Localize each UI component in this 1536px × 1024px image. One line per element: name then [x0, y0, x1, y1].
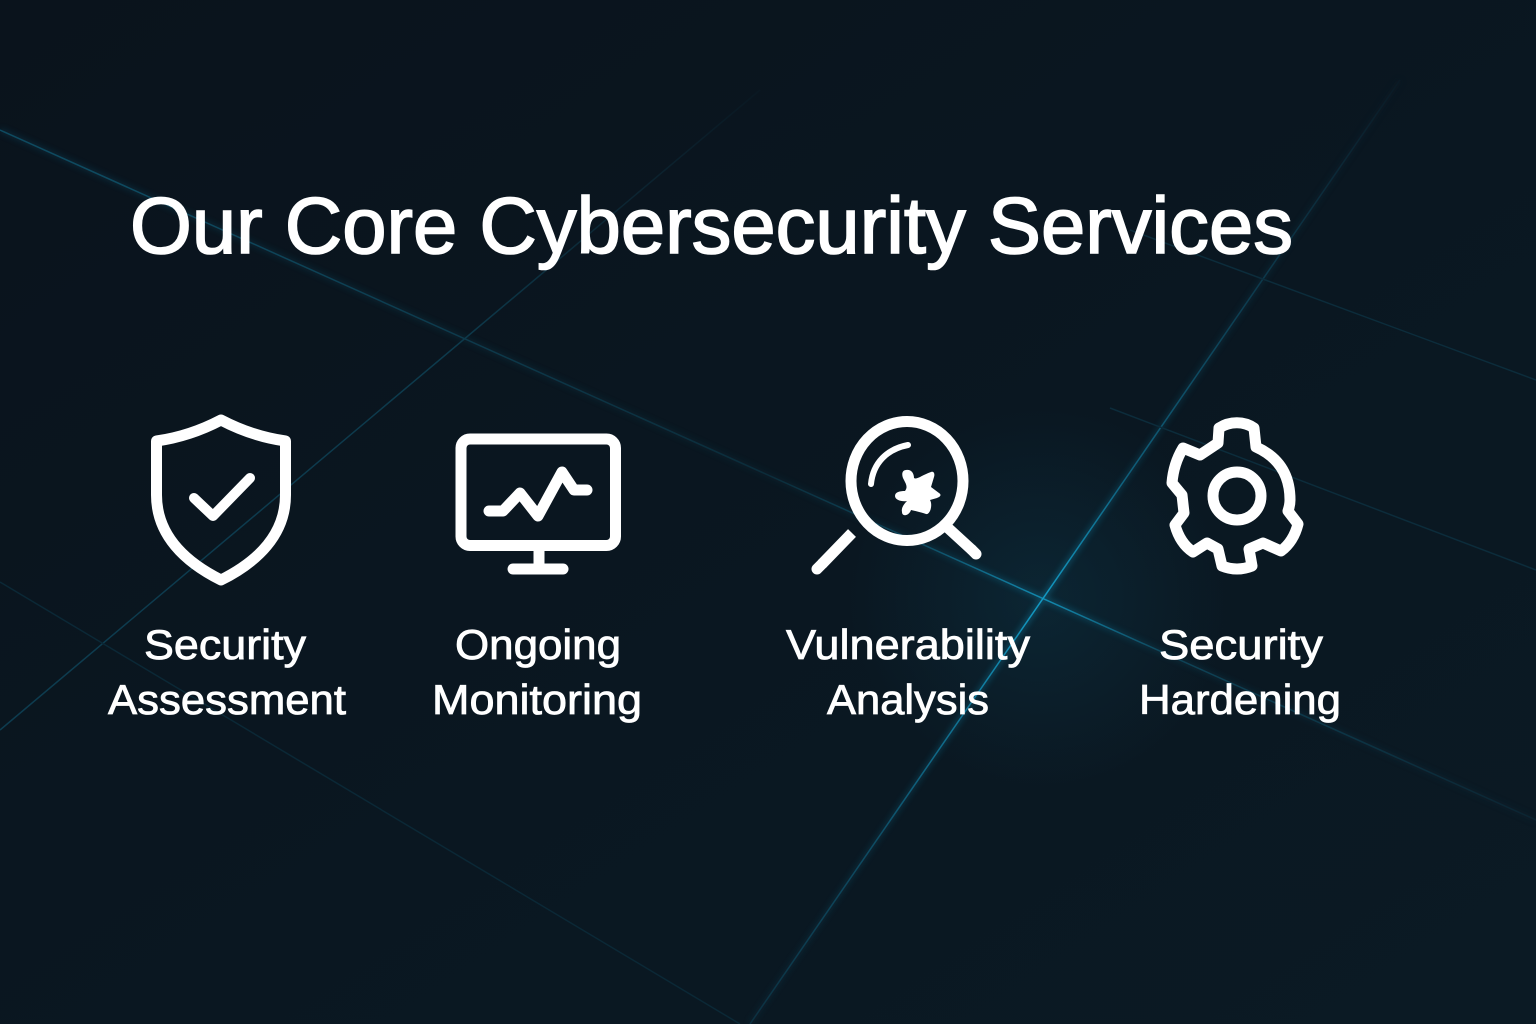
label: security hardening	[1139, 621, 1341, 723]
label: security assessment: Assessment	[108, 676, 346, 723]
icon: shield with check	[156, 420, 286, 580]
label: ongoing monitoring	[432, 621, 642, 723]
label: security assessment	[108, 621, 346, 723]
service: vulnerability analysis	[786, 422, 1030, 723]
title: Our Core Cybersecurity Services	[130, 181, 1293, 270]
service: security assessment	[108, 420, 346, 723]
label: vulnerability analysis: Vulnerability	[786, 621, 1030, 668]
icon: monitor with pulse	[461, 439, 616, 569]
label: security hardening: Security	[1159, 621, 1323, 668]
label: security assessment: Security	[144, 621, 306, 668]
label: vulnerability analysis	[786, 621, 1030, 723]
label: vulnerability analysis: Analysis	[827, 676, 989, 723]
label: ongoing monitoring: Ongoing	[455, 621, 621, 668]
label: ongoing monitoring: Monitoring	[432, 676, 642, 723]
icon: magnifier with bug	[817, 422, 976, 569]
icon: gear	[1172, 423, 1298, 569]
service: security hardening	[1139, 423, 1341, 723]
label: security hardening: Hardening	[1139, 676, 1341, 723]
service: ongoing monitoring	[432, 439, 642, 723]
